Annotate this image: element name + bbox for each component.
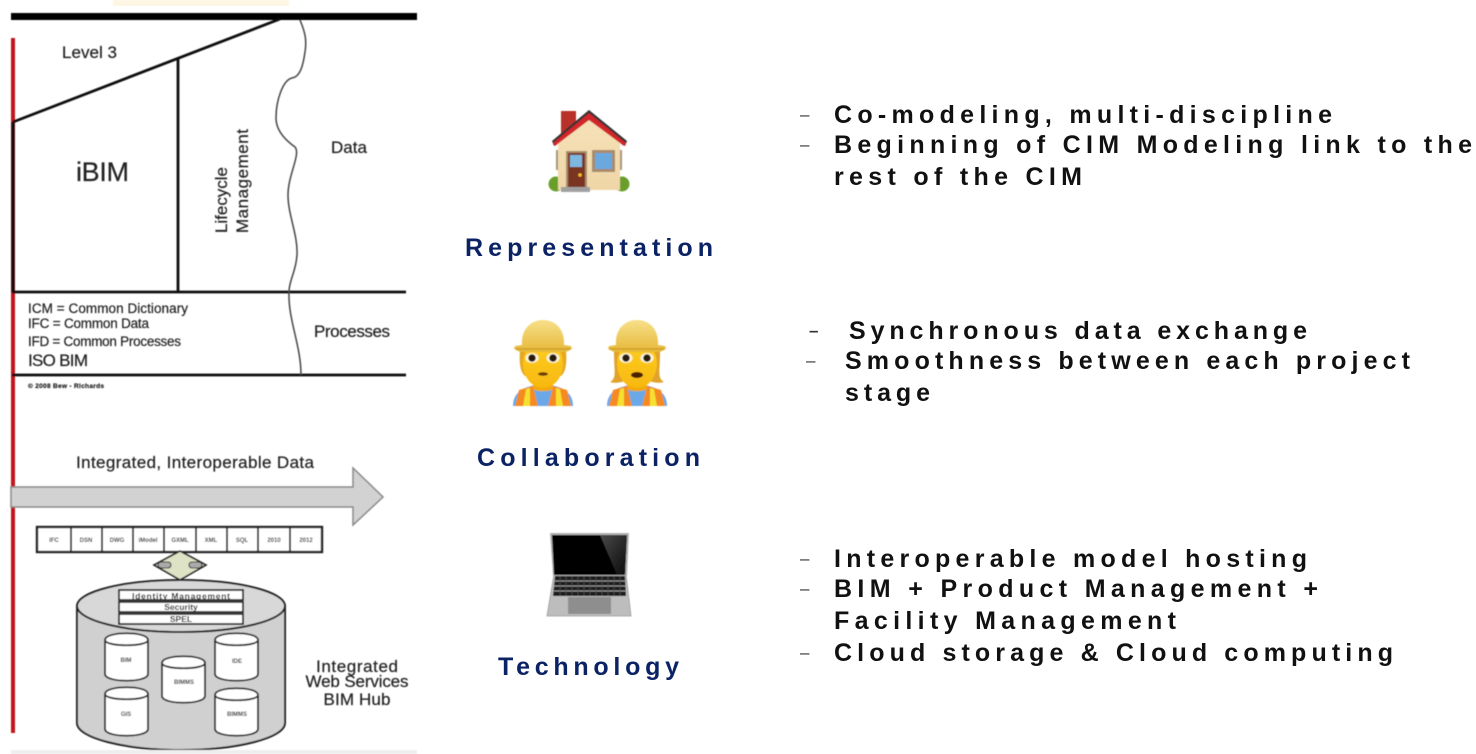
icon: male construction worker (513, 320, 573, 406)
yellow strip at top edge (113, 0, 289, 6)
icon: laptop (547, 533, 631, 616)
label: Representation: Representation (465, 234, 713, 262)
copyright note: © 2008 Bew - Richards (28, 382, 104, 390)
label: Integrated Web Services BIM Hub: Integrated (316, 657, 398, 676)
label: Lifecycle Management (212, 129, 252, 233)
label: Lifecycle Management: Management (233, 129, 252, 233)
hub service rows (119, 590, 243, 624)
standards list: ICM = Common Dictionary (28, 301, 188, 316)
red axis line (11, 38, 15, 733)
standards list: ISO BIM (28, 351, 88, 370)
text block: technology notes (800, 545, 1393, 667)
label: iBIM: iBIM (76, 157, 129, 187)
text block: representation notes: Co-modeling, multi-discipline (834, 101, 1332, 129)
panel: BIM level 3 diagram (11, 0, 417, 754)
icon: house (548, 110, 630, 192)
label: Integrated Web Services BIM Hub: BIM Hub (324, 690, 390, 709)
bottom edge band (11, 750, 417, 754)
diagram frame lines (11, 13, 417, 375)
BIM hub cylinder: BIMMS (174, 680, 194, 686)
text block: representation notes (800, 101, 1472, 191)
label: Technology: Technology (498, 653, 679, 681)
BIM hub cylinder: GIS (121, 712, 131, 718)
file format bar: SQL (236, 538, 248, 544)
text block: technology notes: BIM + Product Management + (834, 575, 1318, 603)
text block: representation notes: rest of the CIM (834, 163, 1082, 191)
arrow (11, 468, 383, 525)
text block: collaboration notes: stage (845, 379, 930, 407)
label: Processes: Processes (314, 322, 390, 341)
hub service rows: Identity Management (132, 591, 230, 601)
file format bar (37, 527, 322, 552)
BIM hub cylinder (77, 580, 285, 750)
label: Level 3: Level 3 (62, 43, 117, 62)
diamond connector (154, 551, 206, 580)
label: Lifecycle Management: Lifecycle (212, 167, 231, 233)
BIM hub cylinder: BIMMS (227, 712, 247, 718)
text block: collaboration notes: Smoothness between each project (845, 347, 1411, 375)
label: Data: Data (331, 138, 368, 157)
text block: representation notes: – (800, 105, 810, 124)
label: Integrated, Interoperable Data: Integrated, Interoperable Data (76, 453, 315, 472)
file format bar: IFC (49, 538, 59, 544)
text block: collaboration notes (806, 317, 1411, 407)
standards list: IFD = Common Processes (28, 334, 181, 349)
text block: representation notes: – (800, 135, 810, 154)
file format bar: GXML (171, 538, 189, 544)
text block: technology notes: Interoperable model hosting (834, 545, 1307, 573)
file format bar: iModel (138, 538, 158, 544)
standards list (28, 301, 188, 370)
label: Integrated Web Services BIM Hub (306, 657, 408, 709)
icon: female construction worker (607, 320, 667, 406)
text block: representation notes: Beginning of CIM Modeling link to the (834, 131, 1472, 159)
text block: technology notes: Facility Management (834, 607, 1177, 635)
text block: collaboration notes: – (809, 321, 818, 340)
text block: technology notes: – (800, 549, 810, 568)
hub service rows: SPEL (170, 614, 192, 624)
text block: technology notes: – (800, 579, 810, 598)
small database cylinders (105, 633, 258, 736)
hub service rows: Security (164, 602, 198, 612)
file format bar: XML (205, 538, 218, 544)
wavy divider between data and model (276, 20, 306, 375)
text block: technology notes: – (800, 643, 810, 662)
file format bar: DSN (80, 538, 92, 544)
file format bar: DWG (110, 538, 125, 544)
BIM hub cylinder: BIM (120, 658, 132, 664)
text block: technology notes: Cloud storage & Cloud computing (834, 639, 1393, 667)
file format bar: 2012 (299, 538, 313, 544)
label: Collaboration: Collaboration (477, 444, 700, 472)
file format bar: 2010 (267, 538, 281, 544)
text block: collaboration notes: – (806, 351, 816, 370)
standards list: IFC = Common Data (28, 316, 149, 331)
label: Integrated Web Services BIM Hub: Web Services (306, 672, 408, 691)
BIM hub cylinder: IDE (232, 659, 242, 665)
text block: collaboration notes: Synchronous data exchange (849, 317, 1307, 345)
